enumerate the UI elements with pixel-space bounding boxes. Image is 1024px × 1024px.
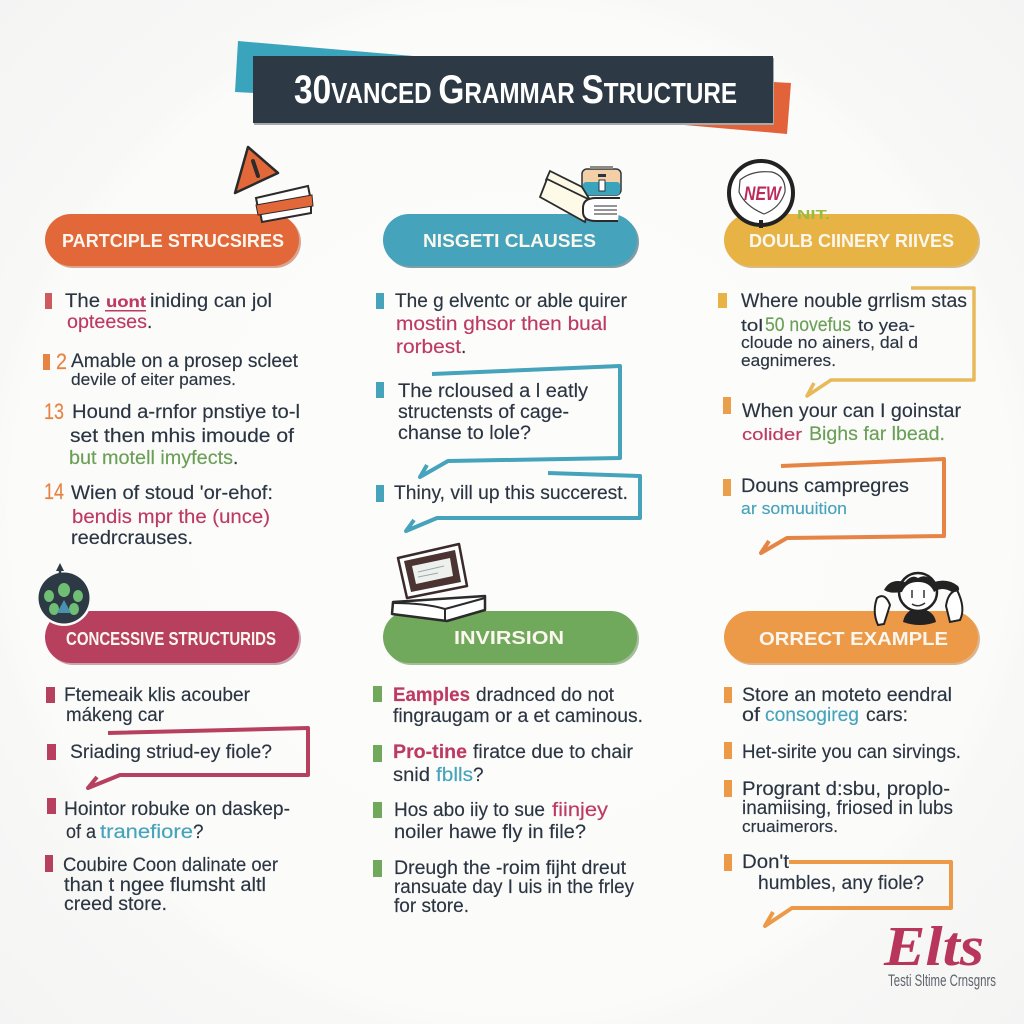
item 3: Thiny, vill up this succerest. — [394, 483, 628, 504]
item 4: Dreugh the -roim fijht dreut — [394, 858, 627, 879]
item 1 — [376, 291, 628, 358]
item 1: opteeses — [67, 312, 147, 333]
item 1 — [45, 291, 272, 333]
item 1: The g elventc or able quirer — [395, 291, 628, 312]
item 4 — [45, 855, 279, 915]
item 4: reedrcrauses. — [71, 528, 193, 549]
logo — [883, 916, 996, 990]
item 1: mákeng car — [66, 705, 165, 726]
item 1 — [46, 685, 251, 726]
heading pill: DOULB CIINERY RIIVES — [749, 230, 954, 251]
panel: inversion — [373, 544, 643, 917]
item 4 — [373, 858, 634, 917]
item 1: of — [742, 705, 761, 726]
item 4: than t ngee flumsht altl — [64, 875, 266, 896]
icon: warning sign and books — [235, 147, 313, 222]
item 1: cars: — [866, 705, 908, 726]
item 4: Don't — [742, 852, 790, 873]
item 1: 50 novefus — [765, 315, 851, 336]
item 1: Ftemeaik klis acouber — [64, 685, 251, 706]
logo: Elts — [883, 916, 984, 978]
item 1: Eamples — [393, 685, 470, 706]
item 2: Sriading striud-ey fiole? — [70, 742, 272, 763]
heading pill: NISGETI CLAUSES — [423, 230, 596, 251]
heading pill — [45, 214, 301, 268]
speech bubble — [807, 288, 974, 396]
item 3 — [724, 779, 953, 836]
heading pill: PARTCIPLE STRUCSIRES — [62, 230, 284, 251]
item 4 — [724, 852, 924, 894]
item 2: colider — [742, 425, 802, 444]
item 1 — [718, 291, 967, 370]
item 1: Where nouble grrlism stas — [741, 291, 967, 312]
icon: new badge: NIT. — [797, 207, 830, 222]
panel: concessive structures — [36, 563, 308, 915]
item 1: to yea- — [858, 316, 915, 335]
speech bubble 2 — [406, 473, 640, 531]
heading pill: CONCESSIVE STRUCTURIDS — [66, 628, 276, 649]
heading pill: INVIRSION — [454, 627, 564, 648]
item 1: tol — [741, 316, 763, 335]
item 3: Hos abo iiy to sue — [394, 800, 545, 821]
item 3: . — [233, 448, 238, 469]
icon: laptop — [392, 544, 485, 621]
item 1: consogireg — [765, 705, 859, 726]
item 2: chanse to lole? — [398, 423, 531, 444]
item 1: Store an moteto eendral — [742, 685, 952, 706]
item 2: The rcloused a l eatly — [398, 381, 589, 402]
item 2: devile of eiter pames. — [71, 370, 236, 389]
item 3: noiler hawe fly in file? — [394, 822, 586, 843]
item 1: uont — [106, 294, 147, 311]
item 3: fiinjey — [552, 800, 609, 821]
item 1: eagnimeres. — [741, 351, 836, 370]
panel: correct example — [724, 573, 980, 926]
item 1 — [373, 685, 643, 727]
item 2 — [376, 381, 589, 444]
item 3: cruaimerors. — [742, 817, 838, 836]
icon: cartoon character — [875, 573, 962, 625]
item 2: Amable on a prosep scleet — [71, 351, 299, 372]
item 1: iniding can jol — [150, 291, 272, 312]
item 2: snid — [393, 765, 430, 786]
item 2: fblls — [436, 765, 473, 786]
item 1: . — [461, 337, 466, 358]
heading pill — [383, 611, 639, 665]
item 3: tranefiore — [100, 822, 193, 843]
speech bubble — [88, 728, 308, 788]
icon: new badge — [729, 161, 830, 228]
item 3: ? — [193, 822, 204, 843]
icon: film reel — [36, 563, 92, 626]
item 3 — [373, 800, 609, 843]
item 3: inamiising, friosed in lubs — [742, 798, 953, 819]
item 3 — [723, 476, 909, 518]
item 4: 14 — [44, 479, 64, 504]
icon: new badge: NEW — [744, 184, 783, 205]
item 2 — [373, 742, 634, 786]
item 2 — [43, 349, 299, 389]
panel: participle structures — [43, 147, 313, 549]
item 4: for store. — [394, 896, 469, 917]
item 1: The — [65, 291, 100, 312]
item 1: cloude no ainers, dal d — [741, 333, 918, 352]
speech bubble 1 — [420, 366, 620, 477]
item 2: Bighs far lbead. — [809, 424, 945, 445]
item 3: 13 — [44, 399, 64, 424]
item 3: set then mhis imoude of — [70, 426, 295, 447]
item 2 — [723, 397, 962, 445]
item 4 — [44, 479, 273, 549]
item 4: ransuate day I uis in the frley — [394, 877, 634, 898]
item 3 — [47, 798, 290, 843]
item 4: Coubire Coon dalinate oer — [63, 855, 279, 876]
item 3: Progrant d:sbu, proplo- — [742, 779, 950, 800]
item 2: 2 — [56, 349, 67, 374]
item 2: structensts of cage- — [398, 402, 569, 423]
item 3: but motell imyfects — [69, 448, 233, 469]
item 4: humbles, any fiole? — [758, 873, 924, 894]
icon: books and bag — [540, 166, 621, 222]
heading pill — [45, 611, 301, 665]
item 4: Wien of stoud 'or-ehof: — [71, 483, 273, 504]
item 2: Pro-tine — [393, 742, 467, 763]
title banner — [235, 41, 791, 134]
item 3: Hound a-rnfor pnstiye to-l — [72, 402, 300, 423]
item 2: When your can I goinstar — [742, 401, 962, 422]
item 2: firatce due to chair — [473, 742, 634, 763]
item 3: Hointor robuke on daskep- — [64, 799, 290, 820]
panel: double clauses — [718, 161, 980, 553]
item 1 — [724, 685, 952, 726]
heading pill: ORRECT EXAMPLE — [759, 628, 948, 649]
item 1: rorbest — [396, 337, 462, 358]
title text: 30VANCED GRAMMAR STRUCTURE — [294, 68, 737, 112]
item 3: ar somuuition — [741, 499, 847, 518]
heading pill — [724, 611, 980, 665]
item 1: fingraugam or a et caminous. — [393, 706, 643, 727]
item 3: of a — [66, 822, 96, 843]
item 3 — [44, 399, 300, 469]
item 1: . — [147, 312, 152, 333]
heading pill — [383, 214, 639, 268]
speech bubble — [765, 862, 951, 926]
item 4: creed store. — [64, 894, 167, 915]
speech bubble — [761, 459, 944, 553]
item 3: Douns campregres — [741, 476, 909, 497]
item 4: bendis mpr the (unce) — [72, 507, 270, 528]
item 1: mostin ghsor then bual — [396, 314, 607, 335]
item 2: ? — [473, 765, 484, 786]
item 1: dradnced do not — [476, 685, 615, 706]
panel: nisgeti clauses — [376, 166, 640, 531]
item 2: Het-sirite you can sirvings. — [742, 742, 961, 763]
heading pill — [724, 214, 980, 268]
